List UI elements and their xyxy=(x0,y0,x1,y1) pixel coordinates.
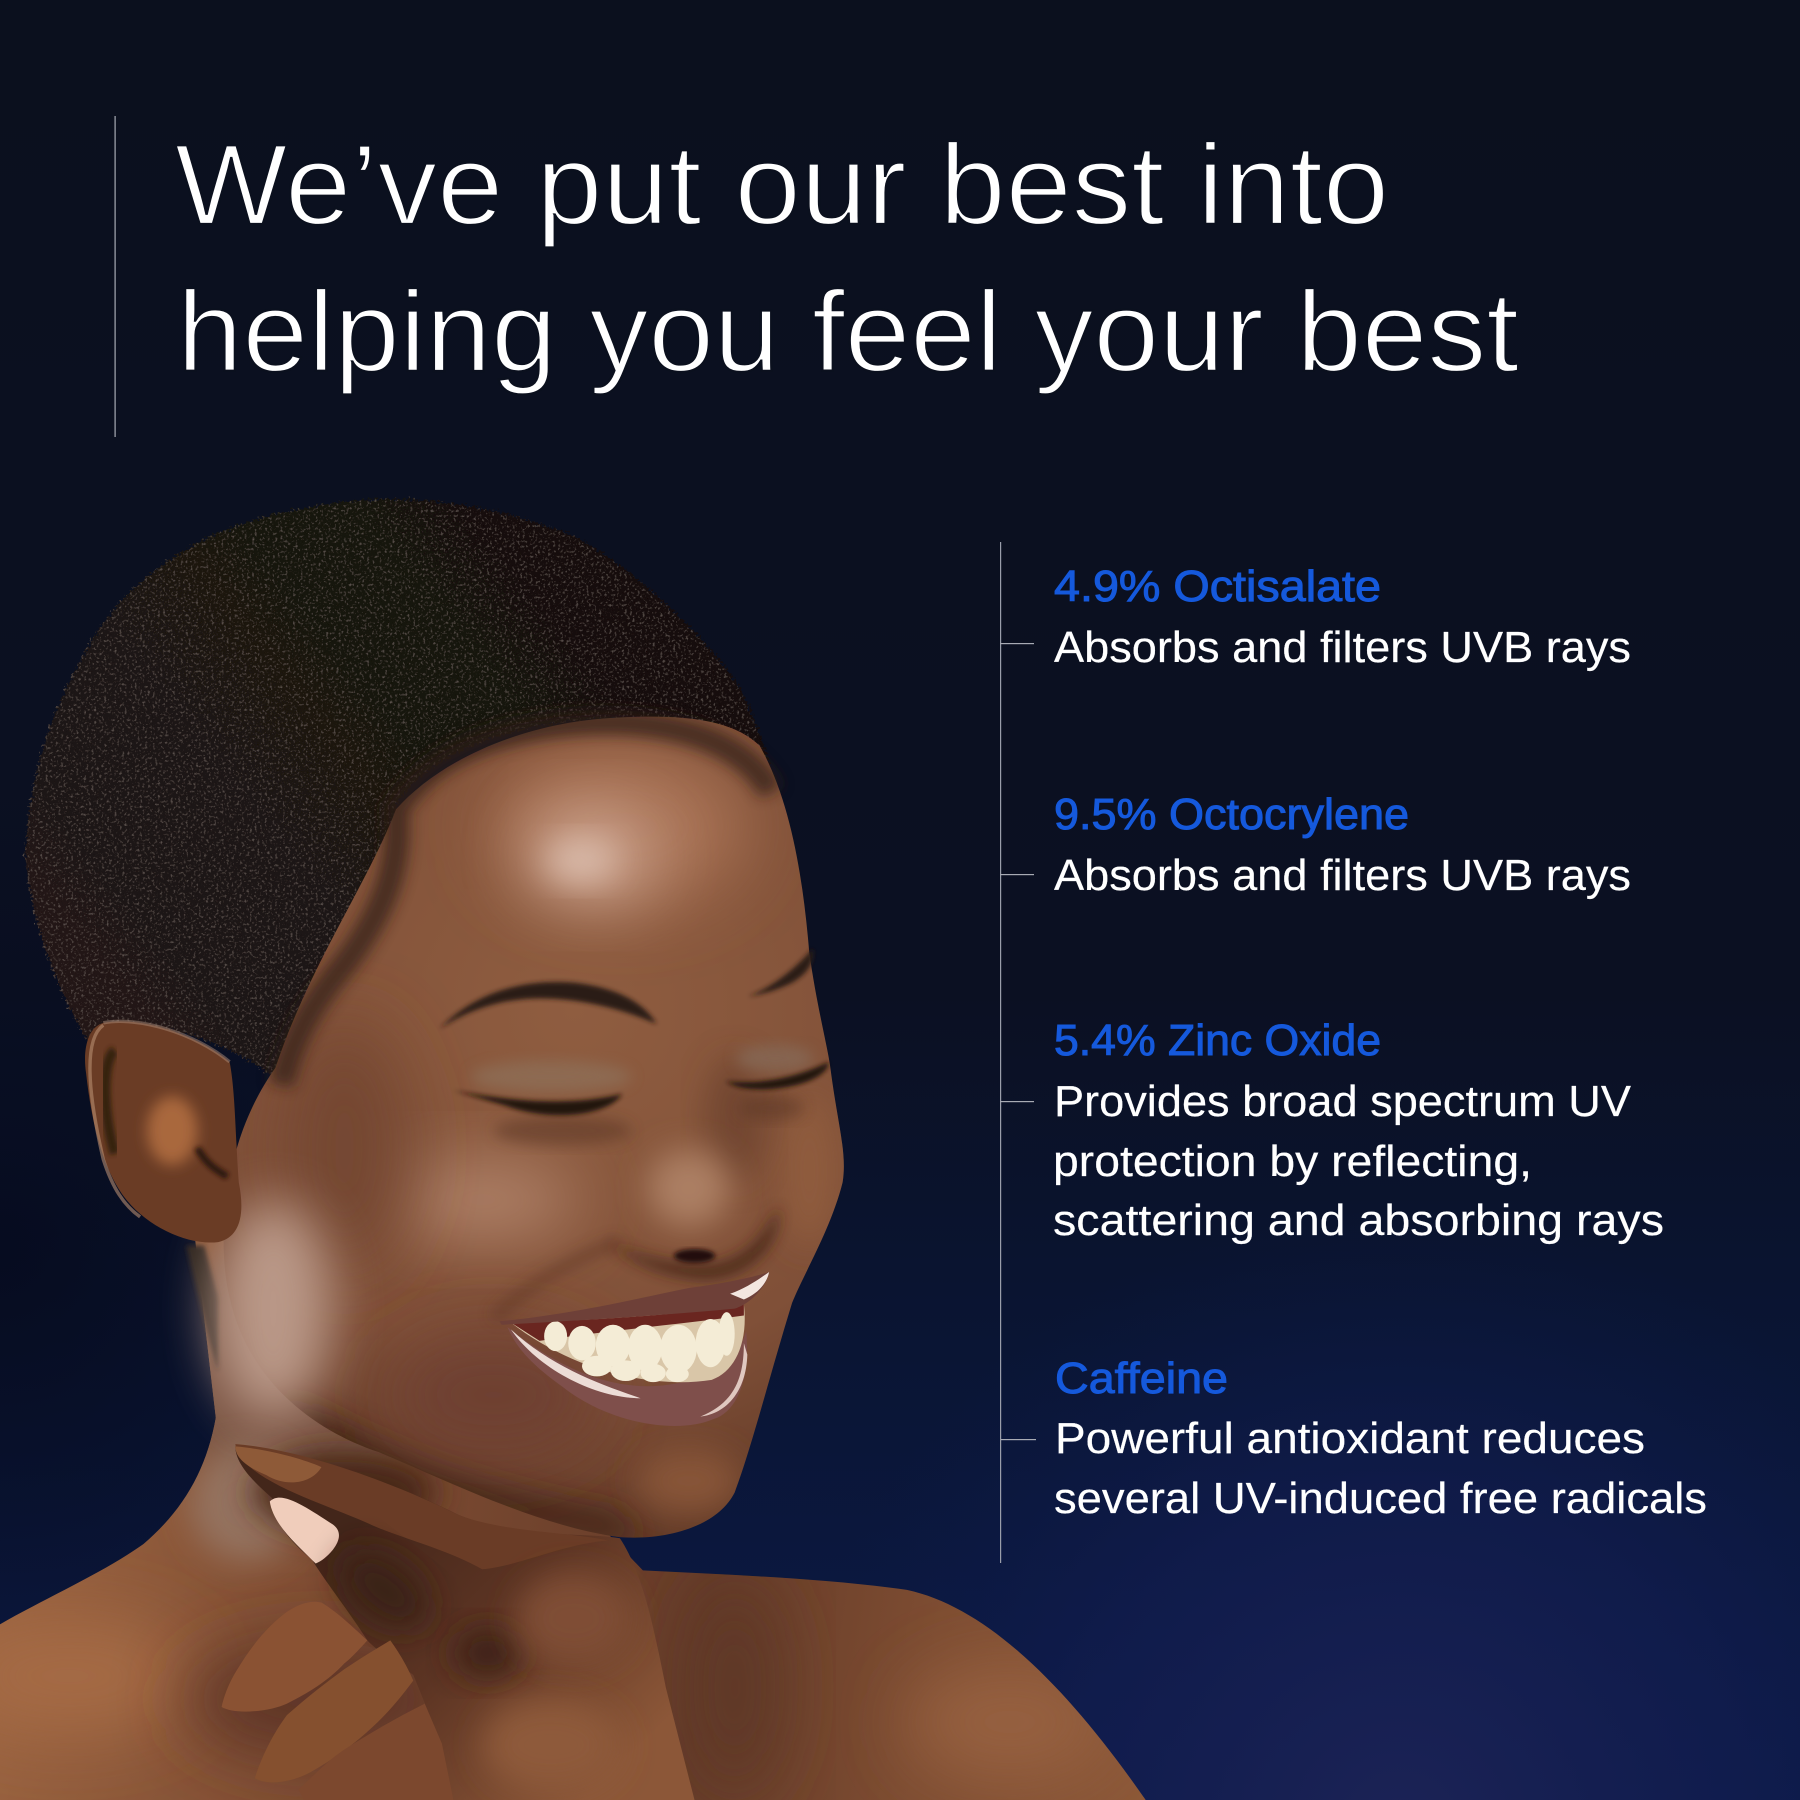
item: caffeine: Powerful antioxidant reduces xyxy=(1055,1414,1645,1463)
item: zinc oxide: protection by reflecting, xyxy=(1053,1137,1532,1186)
title: We’ve put our best into xyxy=(175,122,1389,249)
item: zinc oxide: scattering and absorbing rays xyxy=(1053,1196,1664,1245)
neck and shoulders xyxy=(0,1228,1146,1800)
lower fingers xyxy=(222,1602,367,1712)
thumb nail xyxy=(270,1498,339,1564)
item: zinc oxide: 5.4% Zinc Oxide xyxy=(1054,1016,1381,1065)
item: caffeine: Caffeine xyxy=(1055,1354,1228,1403)
index finger xyxy=(235,1444,608,1569)
title xyxy=(175,122,1519,396)
item: caffeine xyxy=(1001,1354,1707,1523)
item: octocrylene: Absorbs and filters UVB rays xyxy=(1054,851,1631,900)
person photo illustration xyxy=(0,499,1146,1800)
item: octisalate: 4.9% Octisalate xyxy=(1054,562,1381,611)
item: octisalate xyxy=(1000,562,1631,672)
item: octocrylene xyxy=(1000,790,1631,900)
item: zinc oxide: Provides broad spectrum UV xyxy=(1054,1077,1632,1126)
smile xyxy=(499,1272,769,1426)
item: octisalate: Absorbs and filters UVB rays xyxy=(1054,623,1631,672)
title: helping you feel your best xyxy=(177,269,1519,396)
vertical connector line xyxy=(1000,542,1001,1563)
item: octocrylene: 9.5% Octocrylene xyxy=(1054,790,1409,839)
hand xyxy=(222,1444,695,1800)
face xyxy=(214,717,844,1544)
neck highlight xyxy=(214,1200,333,1418)
knuckle shadows xyxy=(326,1535,443,1645)
title rule xyxy=(114,116,116,437)
ingredient list xyxy=(1000,542,1707,1563)
hair xyxy=(25,499,785,1085)
eyebrows xyxy=(440,948,813,1029)
item: zinc oxide xyxy=(1000,1016,1664,1245)
ear xyxy=(85,1021,241,1243)
soft hairline xyxy=(281,722,771,1085)
closed eyes xyxy=(453,1062,829,1115)
nose xyxy=(608,1205,779,1279)
item: caffeine: several UV-induced free radicals xyxy=(1054,1474,1707,1523)
